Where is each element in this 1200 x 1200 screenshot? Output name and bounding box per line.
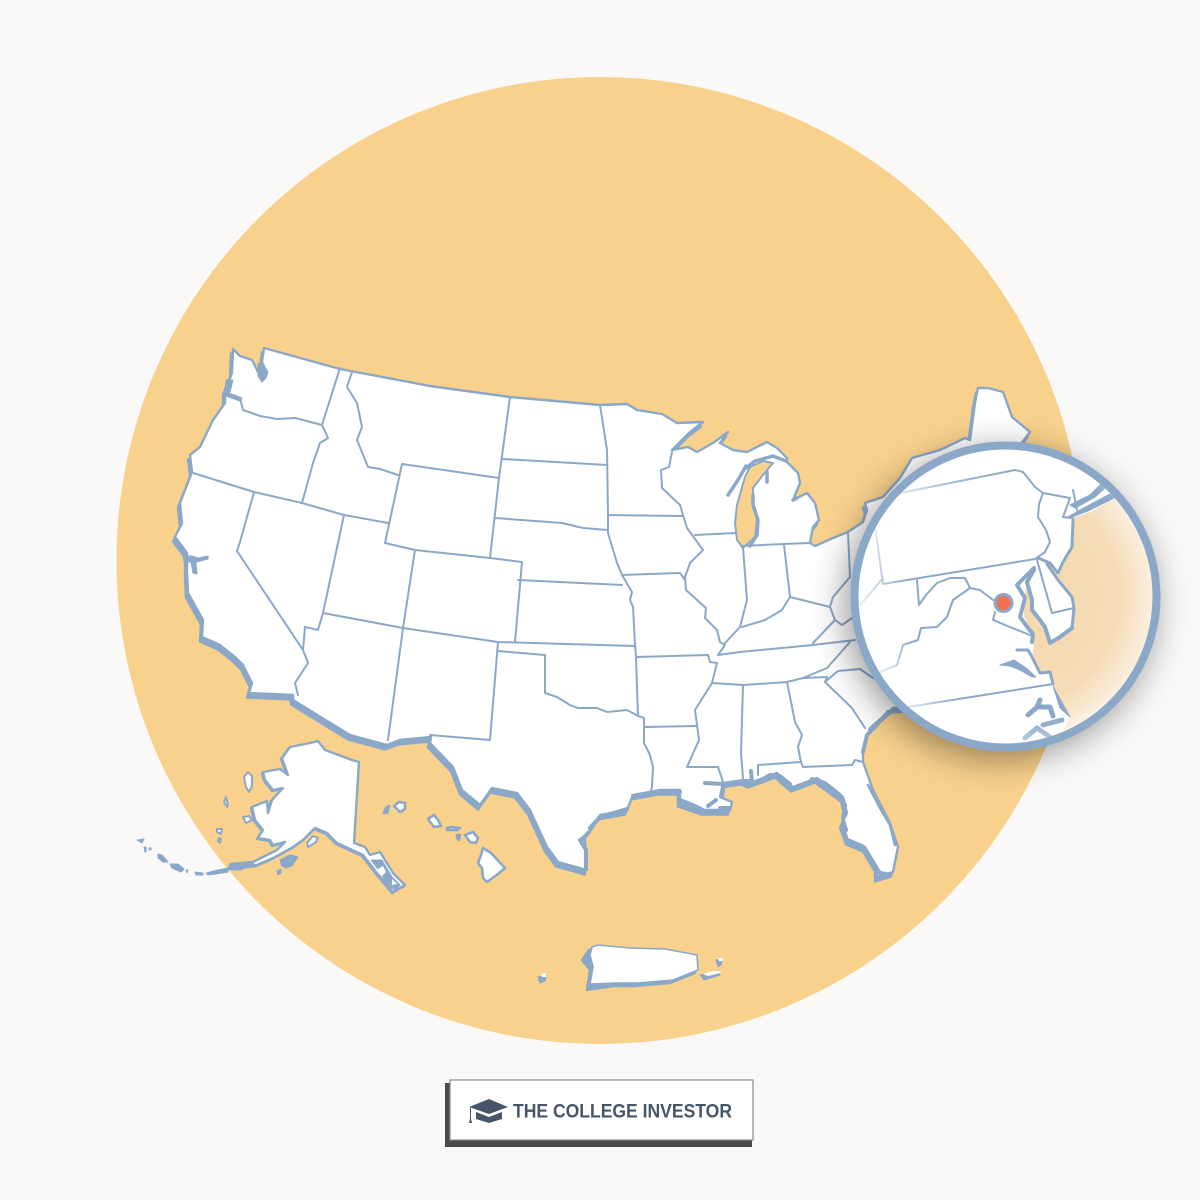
lens North Carolina sounds <box>1025 700 1062 738</box>
icon: graduation cap <box>469 1099 508 1123</box>
lens state borders <box>860 470 1077 707</box>
lens James River <box>1000 660 1036 677</box>
magnifier shadow <box>846 450 1154 758</box>
logo shadow <box>445 1083 752 1147</box>
Alaska <box>137 741 405 893</box>
lens Virginia rivers and shore <box>1017 650 1053 684</box>
wordmark: THE COLLEGE INVESTOR <box>513 1102 732 1122</box>
magnifying lens showing Washington DC area <box>850 440 1170 760</box>
lens edge fade <box>859 469 1114 740</box>
lens Long Island <box>1066 482 1116 518</box>
Florida Atlantic shoreline <box>868 785 895 845</box>
Aleutian Islands <box>137 839 254 875</box>
logo <box>445 1080 753 1147</box>
yellow circle backdrop <box>116 77 1084 1044</box>
state borders <box>190 368 873 793</box>
lens ocean and bays <box>1024 498 1152 732</box>
lens New Jersey and Delaware shoreline <box>1038 520 1074 628</box>
Vieques and Culebra <box>700 959 722 980</box>
lens Outer Banks <box>1053 686 1070 717</box>
lens Chesapeake Bay shores <box>1017 568 1072 643</box>
Puerto Rico <box>538 945 723 990</box>
Hawaii <box>384 802 505 882</box>
Gulf coast wetlands <box>580 712 888 874</box>
Lake Michigan <box>735 461 773 548</box>
lens land background <box>858 450 1114 744</box>
map of the contiguous United States <box>173 348 1030 882</box>
lens ring <box>854 446 1156 748</box>
Washington DC marker <box>995 594 1012 612</box>
Michigan shoreline and Green Bay <box>728 456 797 546</box>
Mona Island <box>538 975 546 983</box>
logo box <box>450 1080 753 1140</box>
